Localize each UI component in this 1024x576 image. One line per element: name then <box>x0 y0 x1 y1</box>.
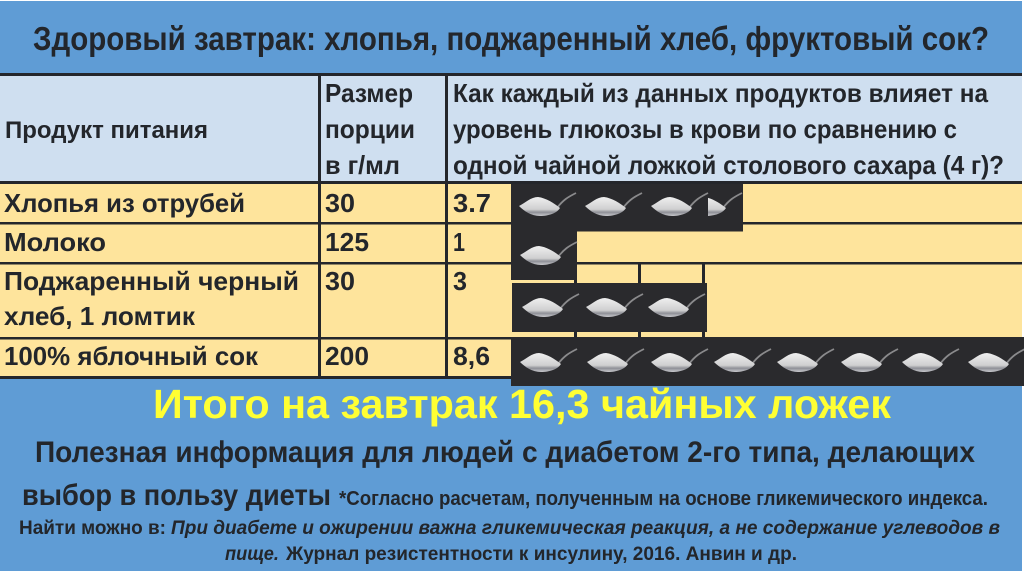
row: toast: Поджаренный черный <box>4 266 299 296</box>
info text continued: выбор в пользу диеты <box>22 479 331 512</box>
table body panel <box>0 73 1022 379</box>
row: bran flakes: Хлопья из отрубей <box>4 188 245 218</box>
row: milk <box>4 227 465 257</box>
source: Журнал резистентности к инсулину, 2016. Анвин и др. <box>285 543 797 565</box>
row: bran flakes: 30 <box>325 188 355 218</box>
spoons: bran flakes 3.7 <box>511 184 743 232</box>
row: milk: 125 <box>325 227 369 257</box>
row: toast <box>4 266 467 331</box>
row: milk: Молоко <box>4 227 106 257</box>
source: Найти можно в: <box>19 517 166 539</box>
header: glucose comparison: уровень глюкозы в крови по сравнению с <box>453 114 957 144</box>
header: portion size: в г/мл <box>325 150 400 180</box>
header: portion size: Размер <box>325 78 413 108</box>
header: portion size: порции <box>325 114 415 144</box>
spoons: milk 1 <box>511 224 577 280</box>
spoons: apple juice 8.6 <box>511 337 1024 386</box>
header: product: Продукт питания <box>5 117 208 144</box>
source: пище. <box>225 543 279 565</box>
spoons: toast 3 <box>512 283 707 332</box>
info text: Полезная информация для людей с диабетом 2-го типа, делающих <box>35 436 976 469</box>
row: toast: 3 <box>453 266 467 296</box>
row: apple juice: 100% яблочный сок <box>4 341 259 371</box>
row: milk: 1 <box>453 227 465 257</box>
table header panel <box>0 75 1022 181</box>
row: bran flakes <box>4 188 491 218</box>
row: toast: хлеб, 1 ломтик <box>4 301 196 331</box>
total line: Итого на завтрак 16,3 чайных ложек <box>153 381 891 427</box>
row: bran flakes: 3.7 <box>453 188 491 218</box>
source: При диабете и ожирении важна гликемическая реакция, а не содержание углеводов в <box>171 517 1000 539</box>
header: portion size <box>325 78 415 180</box>
row: apple juice: 8,6 <box>453 341 490 371</box>
source <box>19 517 1000 565</box>
row: apple juice: 200 <box>325 341 369 371</box>
header: glucose comparison: Как каждый из данных продуктов влияет на <box>453 78 989 108</box>
row: apple juice <box>4 341 490 371</box>
row: toast: 30 <box>325 266 355 296</box>
header: glucose comparison <box>453 78 1004 180</box>
